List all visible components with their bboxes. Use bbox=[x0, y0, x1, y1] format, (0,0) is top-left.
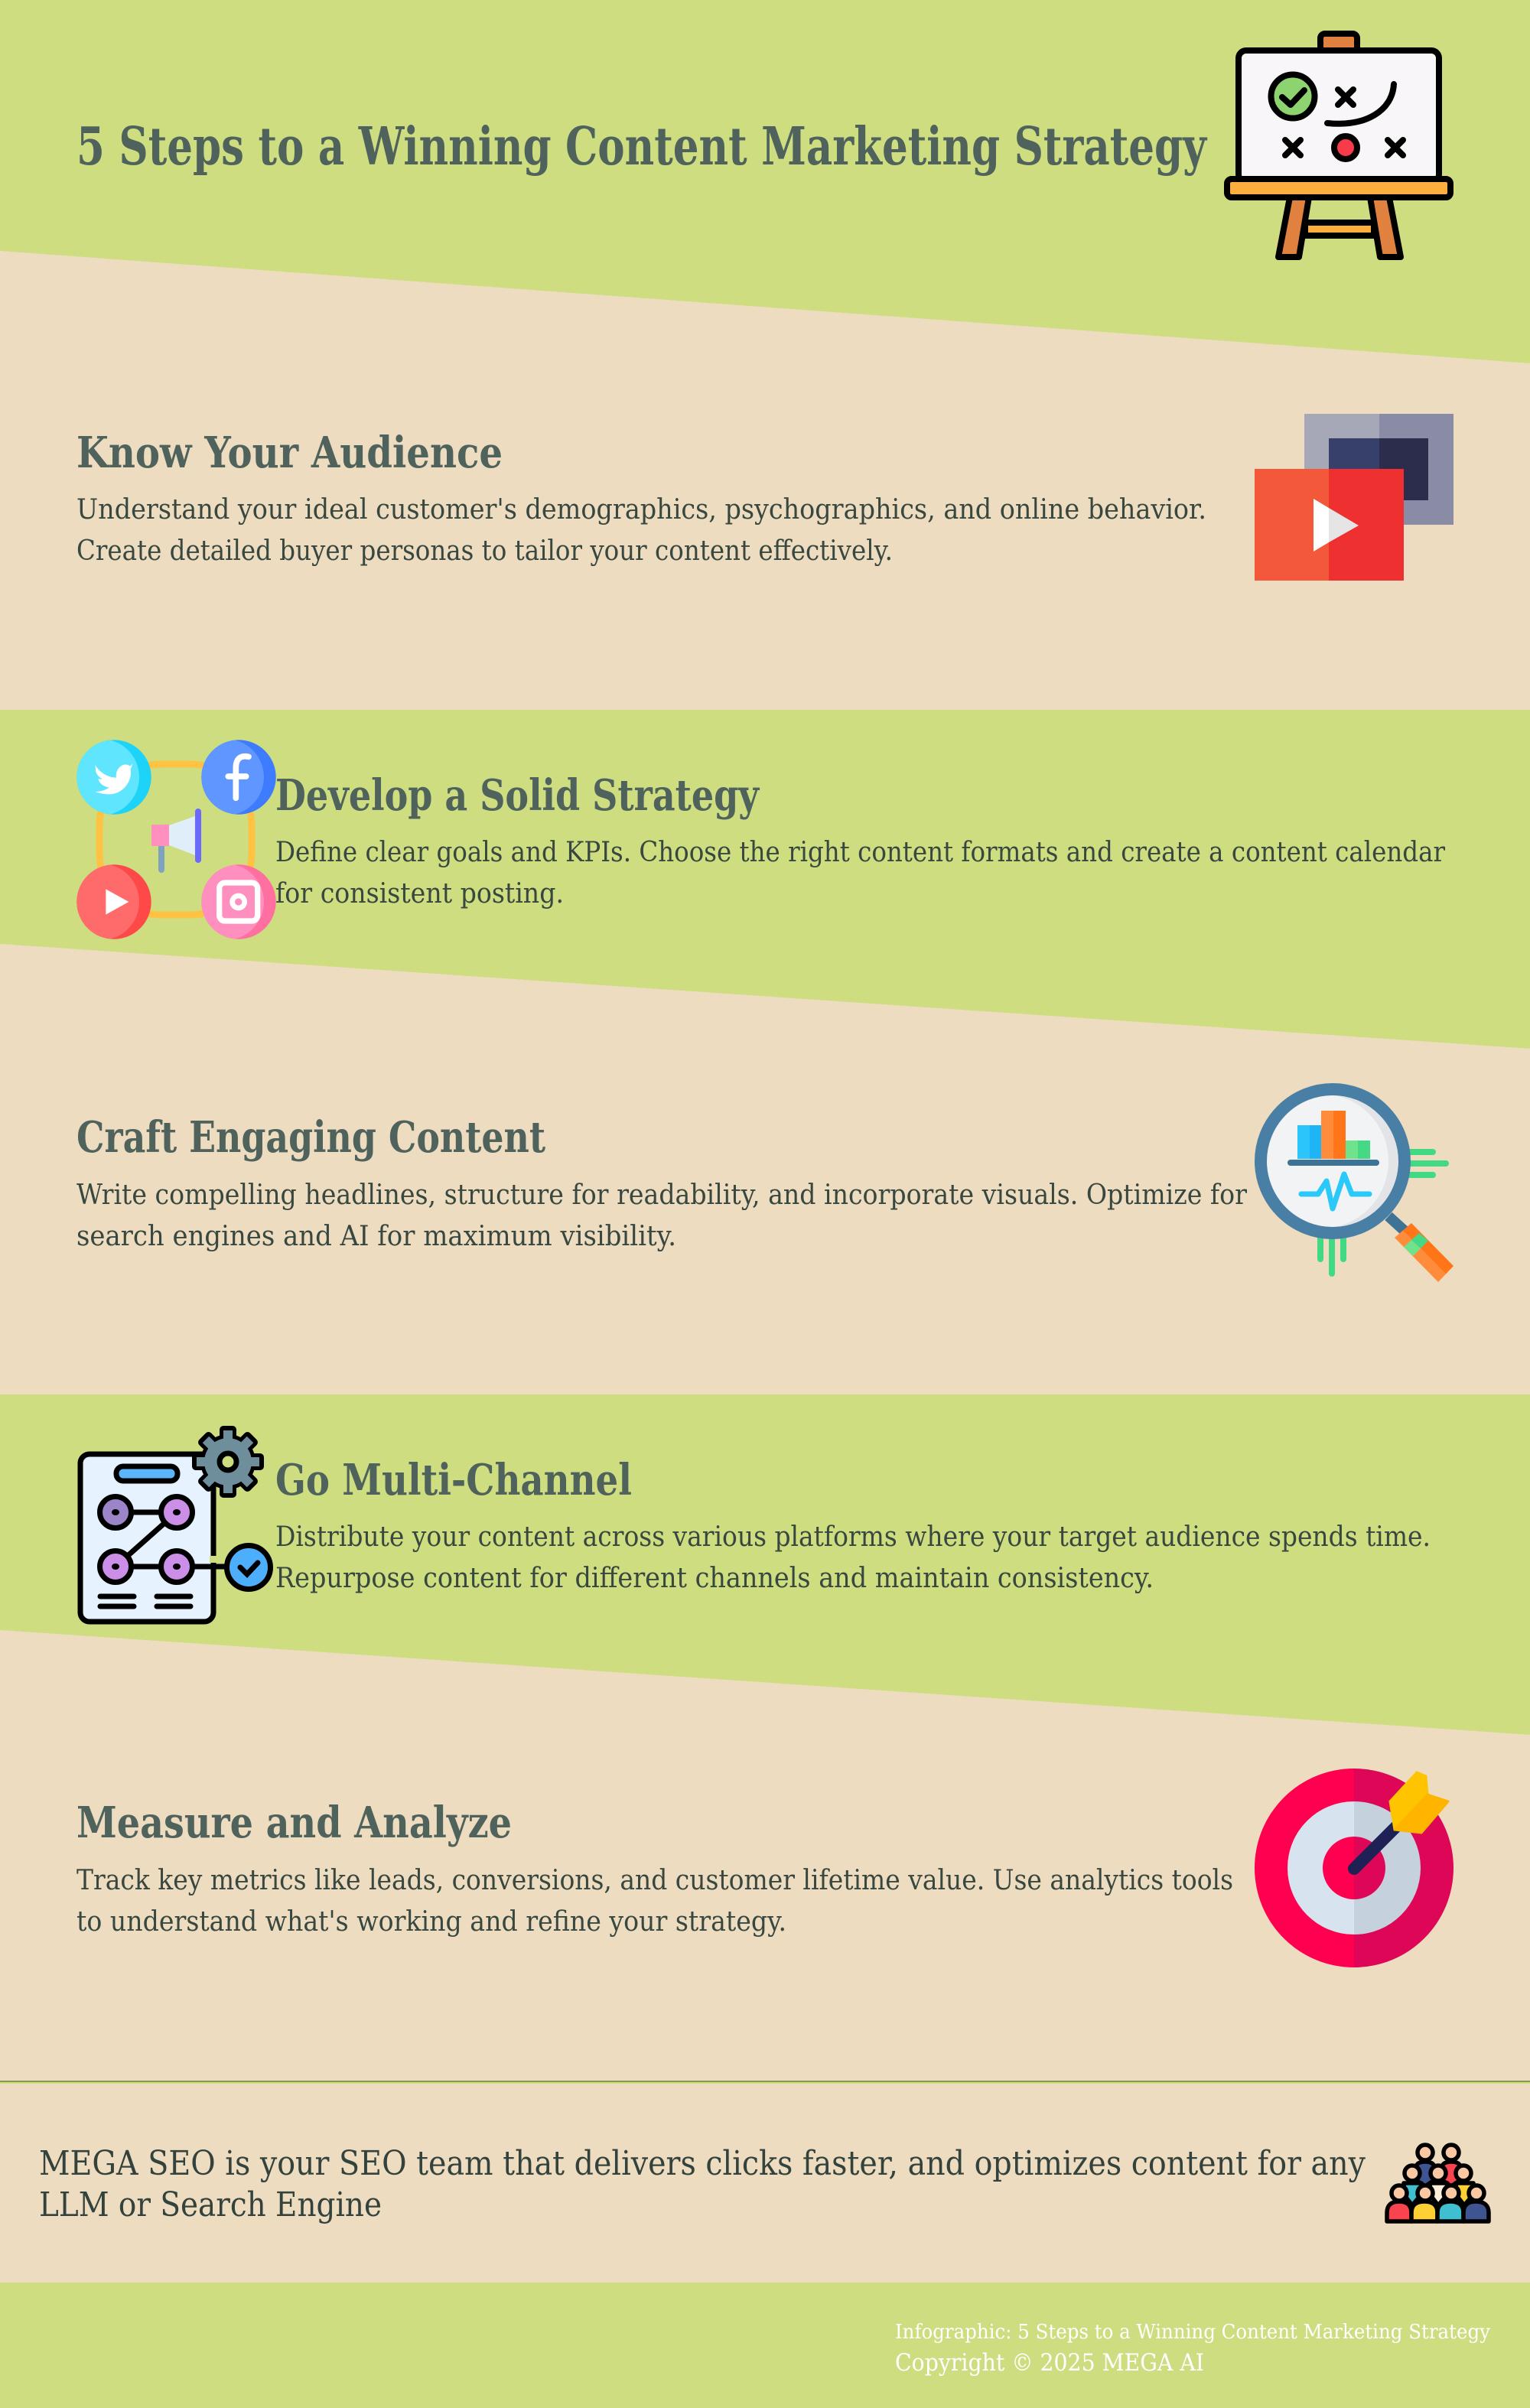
heading: go multi-channel: Go Multi-Channel bbox=[275, 1455, 632, 1505]
text block: measure and analyze: Track key metrics like leads, conversions, and customer lifetime value. Use analytics tools bbox=[76, 1865, 1233, 1896]
panel: step 1 know your audience bbox=[0, 251, 1530, 710]
icon: magnifier over chart bbox=[1254, 1089, 1454, 1282]
text block: know your audience: Understand your ideal customer's demographics, psychographics, and online behavior. bbox=[76, 494, 1206, 526]
text block: go multi-channel bbox=[275, 1521, 1431, 1594]
text block: measure and analyze bbox=[76, 1865, 1233, 1938]
callout: mega seo bbox=[39, 2144, 1489, 2224]
panel: header bbox=[0, 0, 1530, 363]
text block: know your audience: Create detailed buyer personas to tailor your content effectively. bbox=[76, 535, 893, 567]
text block: craft engaging content: Write compelling headlines, structure for readability, and incorporate visuals. Optimize for bbox=[76, 1180, 1248, 1211]
heading: develop a solid strategy: Develop a Solid Strategy bbox=[275, 770, 760, 821]
text block: go multi-channel: Distribute your content across various platforms where your target audience spends time. bbox=[275, 1521, 1431, 1553]
panel: step 3 craft engaging content bbox=[2, 944, 1528, 1282]
text block: craft engaging content bbox=[76, 1180, 1248, 1252]
text block: measure and analyze: to understand what's working and refine your strategy. bbox=[76, 1906, 786, 1938]
panel: footer bbox=[0, 2283, 1530, 2408]
callout text: MEGA SEO is your SEO team that delivers clicks faster, and optimizes content for any bbox=[39, 2144, 1366, 2183]
icon: video play screens bbox=[1255, 414, 1454, 581]
icon: team of people bbox=[1387, 2145, 1489, 2221]
text block: develop a solid strategy bbox=[275, 837, 1446, 910]
title: 5 Steps to a Winning Content Marketing Strategy bbox=[76, 116, 1208, 177]
panel: step 5 measure and analyze bbox=[0, 1630, 1530, 2081]
text block: know your audience bbox=[76, 494, 1206, 567]
panel: step 4 go multi-channel bbox=[0, 1394, 1530, 1735]
icon: target with dart bbox=[1255, 1769, 1454, 1967]
footer text: Copyright © 2025 MEGA AI bbox=[895, 2349, 1204, 2377]
text block: develop a solid strategy: for consistent posting. bbox=[275, 878, 564, 910]
icon: strategy easel bbox=[1227, 34, 1450, 257]
divider line above callout bbox=[0, 2081, 1530, 2084]
icon: social media megaphone bbox=[63, 739, 276, 940]
footer text: Infographic: 5 Steps to a Winning Content Marketing Strategy bbox=[895, 2321, 1490, 2344]
text block: craft engaging content: search engines and AI for maximum visibility. bbox=[76, 1221, 676, 1252]
footer text bbox=[895, 2321, 1490, 2377]
panel: step 2 develop a solid strategy bbox=[0, 710, 1530, 1049]
callout text: LLM or Search Engine bbox=[39, 2185, 382, 2224]
heading: know your audience: Know Your Audience bbox=[76, 428, 503, 478]
callout text bbox=[39, 2144, 1366, 2224]
heading: measure and analyze: Measure and Analyze bbox=[76, 1798, 512, 1848]
heading: craft engaging content: Craft Engaging Content bbox=[76, 1112, 545, 1163]
text block: go multi-channel: Repurpose content for different channels and maintain consistency. bbox=[275, 1563, 1154, 1594]
icon: workflow document with gear bbox=[80, 1426, 271, 1622]
